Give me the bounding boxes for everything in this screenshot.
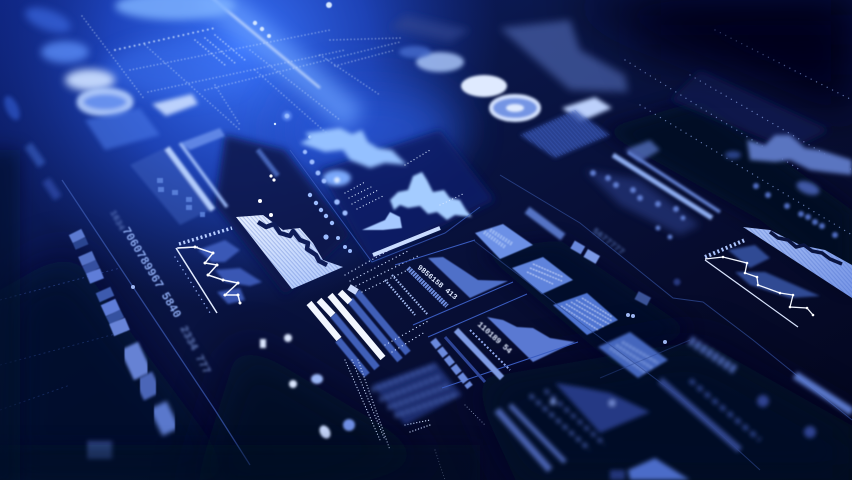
stacked bar chart: [309, 287, 408, 375]
dotted matrix centre: [345, 245, 485, 480]
glowing top dots: [253, 2, 332, 139]
digits column: 2334 777: [176, 324, 212, 377]
long circuit line: [473, 175, 852, 470]
blocks and digits along right of cards: 5677777: [590, 226, 626, 258]
light streak: [105, 0, 355, 120]
map dotted cluster: [345, 150, 465, 209]
blurred dot grid below bars: [372, 362, 462, 425]
top-left blurred circle charts: [1, 2, 198, 150]
axis frame: [705, 260, 798, 327]
card 3: [553, 293, 618, 335]
data column bar: [408, 268, 447, 306]
corner shape: [625, 140, 660, 162]
top-right dotted lines: [625, 30, 852, 235]
mountain area: [487, 317, 575, 362]
digits column: [107, 209, 212, 377]
diagonal dot column: [258, 150, 352, 253]
histogram: right: [743, 227, 852, 298]
map: small island: [323, 170, 351, 186]
jagged data line: [705, 257, 813, 315]
digits column: 7060789967 5840: [119, 225, 183, 321]
scattered round dots lower-left: [260, 334, 355, 441]
map: lower continent: [362, 212, 402, 230]
line chart on map: left: [175, 228, 262, 316]
card 1: [475, 224, 533, 259]
centre world map panel: [290, 128, 480, 262]
left stacked blocks: [75, 232, 171, 432]
blurred dot cluster: [585, 170, 700, 235]
columns: [433, 340, 470, 387]
line chart on map: right: [705, 240, 820, 327]
axis frame: [176, 248, 217, 313]
map highlight bar: [373, 228, 440, 255]
blue bar tracks: [333, 292, 408, 375]
white bar segments: [309, 287, 383, 358]
dotted top scale: [179, 228, 232, 244]
card 2: [512, 257, 573, 294]
panel frame: [395, 240, 513, 325]
blocks and digits along right of cards: [527, 210, 680, 344]
small blocks beside left bars: [157, 178, 205, 217]
paired light bars: [613, 155, 712, 218]
jagged data line: [178, 247, 240, 303]
right blurred map: [725, 135, 852, 198]
top-left dotted grid lines: [82, 16, 400, 145]
data column digits: 9856158 413: [415, 264, 459, 302]
dotted bottom scale: [175, 257, 212, 316]
panel frame: [428, 294, 578, 388]
top-centre circle charts: [399, 46, 612, 158]
left pair of light bars: [130, 128, 227, 225]
right dot column: [753, 183, 838, 238]
left diagonal rail: [0, 180, 250, 465]
map silhouette: [728, 245, 820, 298]
map silhouette: [198, 240, 262, 304]
text rows: [385, 275, 428, 315]
chart panel B: [428, 294, 578, 388]
bottom-right blurred blocks: [610, 340, 852, 480]
mountain area: [428, 257, 508, 298]
panel outline: [290, 150, 480, 262]
digits column: 1634: [107, 209, 127, 233]
chart panel C blurred: [497, 383, 650, 470]
info cards: [475, 224, 668, 378]
right bar panel: [585, 140, 720, 240]
map: middle continent: [390, 172, 472, 220]
chart panel A: [385, 240, 513, 325]
histogram: left bright: [236, 215, 343, 289]
upper-left faint blocks: [28, 145, 112, 450]
value digits: 110189 54: [475, 321, 513, 356]
top-right blurred map: [390, 15, 830, 150]
card 4: [598, 332, 668, 378]
map: upper continent: [300, 128, 407, 168]
dotted top scale: [705, 240, 745, 257]
